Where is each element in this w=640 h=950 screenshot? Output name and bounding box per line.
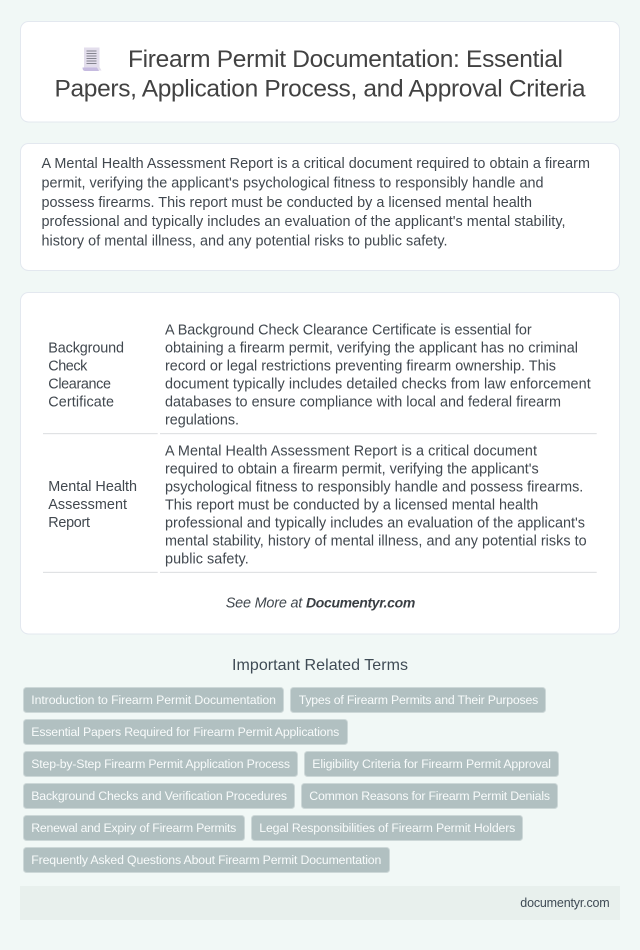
row description: background check: obtaining a firearm permit, verifying the applicant has no criminal xyxy=(165,340,578,356)
see more link: Documentyr.com xyxy=(306,595,415,611)
panel: document table card xyxy=(20,292,620,634)
icon: document receipt xyxy=(82,48,102,71)
tag list: related terms xyxy=(24,688,558,872)
tag: Common Reasons for Firearm Permit Denials xyxy=(309,789,550,803)
row label: background check clearance certificate xyxy=(48,340,124,410)
tag xyxy=(252,816,522,840)
row description: mental health: mental stability, history of mental illness, and any potential risks to xyxy=(165,533,587,549)
row description: background check: document typically includes detailed checks from law enforcement xyxy=(165,376,591,392)
tag xyxy=(24,720,348,744)
row label: mental health assessment report xyxy=(48,479,137,531)
text block: summary paragraph: permit, verifying the applicant's psychological fitness to responsibly handle and xyxy=(42,175,544,191)
footer bar: documentyr.com xyxy=(520,896,610,910)
title xyxy=(54,46,586,102)
row label: mental health assessment report: Mental Health xyxy=(48,479,137,495)
row description: background check: databases to ensure compliance with local and federal firearm xyxy=(165,394,561,410)
tag xyxy=(290,688,546,712)
text block: summary paragraph: A Mental Health Assessment Report is a critical document required to obtain a firearm xyxy=(42,156,590,172)
table row: mental health xyxy=(48,443,587,567)
row description: mental health: public safety. xyxy=(165,551,249,567)
row label: mental health assessment report: Report xyxy=(48,515,90,531)
tag xyxy=(24,784,294,808)
tag xyxy=(24,848,390,872)
row label: mental health assessment report: Assessment xyxy=(48,497,127,513)
panel: title card xyxy=(20,22,620,122)
tag xyxy=(302,784,558,808)
row description: background check: regulations. xyxy=(165,412,239,428)
title: Papers, Application Process, and Approval Criteria xyxy=(54,76,586,102)
tag: Background Checks and Verification Procedures xyxy=(31,789,287,803)
tag: Frequently Asked Questions About Firearm Permit Documentation xyxy=(31,853,381,867)
heading: important related terms: Important Related Terms xyxy=(232,657,408,674)
tag xyxy=(304,752,558,776)
text block: summary paragraph: history of mental illness, and any potential risks to public safety. xyxy=(42,234,448,250)
row description: mental health: psychological fitness to responsibly handle and possess firearms. xyxy=(165,479,583,495)
text block: summary paragraph: professional and typically includes an evaluation of the applicant's mental stability, xyxy=(42,214,566,230)
tag: Essential Papers Required for Firearm Permit Applications xyxy=(31,725,339,739)
row description: background check xyxy=(165,322,591,428)
text block: summary paragraph: possess firearms. This report must be conducted by a licensed mental health xyxy=(42,195,532,211)
tag: Eligibility Criteria for Firearm Permit Approval xyxy=(312,757,551,771)
row description: mental health: required to obtain a firearm permit, verifying the applicant's xyxy=(165,461,539,477)
row description: mental health: A Mental Health Assessment Report is a critical document xyxy=(165,443,537,459)
tag: Types of Firearm Permits and Their Purposes xyxy=(299,693,538,707)
see more link xyxy=(226,595,415,612)
tag: Introduction to Firearm Permit Documentation xyxy=(31,693,276,707)
title: Firearm Permit Documentation: Essential xyxy=(128,46,563,73)
tag: Legal Responsibilities of Firearm Permit Holders xyxy=(259,821,515,835)
tag: Renewal and Expiry of Firearm Permits xyxy=(31,821,236,835)
row label: background check clearance certificate: Check xyxy=(48,358,88,374)
tag: Step-by-Step Firearm Permit Application Process xyxy=(31,757,290,771)
tag xyxy=(24,816,244,840)
row label: background check clearance certificate: Certificate xyxy=(48,394,114,410)
tag xyxy=(24,688,284,712)
row description: mental health: professional and typically includes an evaluation of the applicant's xyxy=(165,515,585,531)
footer bar xyxy=(20,886,620,920)
row description: mental health: This report must be conducted by a licensed mental health xyxy=(165,497,538,513)
text block: summary paragraph xyxy=(42,156,590,250)
row description: background check: A Background Check Clearance Certificate is essential for xyxy=(165,322,532,338)
panel: summary paragraph card xyxy=(20,144,620,270)
tag xyxy=(24,752,298,776)
see more link: See More at xyxy=(226,596,303,612)
row label: background check clearance certificate: Background xyxy=(48,340,124,356)
table row: background check xyxy=(48,322,591,428)
row description: background check: record or legal restrictions preventing firearm ownership. This xyxy=(165,358,556,374)
row description: mental health xyxy=(165,443,587,567)
row label: background check clearance certificate: Clearance xyxy=(48,376,111,392)
